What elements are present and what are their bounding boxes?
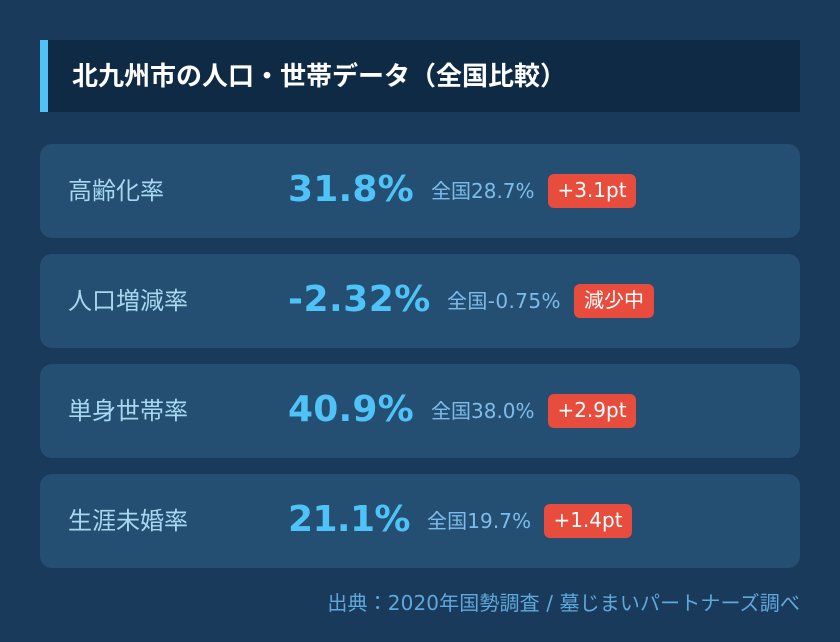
label: population change: 人口増減率 [68,287,188,315]
panel: aging rate [40,144,800,238]
label: aging rate: 高齢化率 [68,177,164,205]
value: lifetime unmarried rate: 21.1% [288,499,410,540]
badge: decreasing: 減少中 [584,288,644,312]
badge: lifetime unmarried difference [544,504,632,538]
panel: population change [40,254,800,348]
national comparison: lifetime unmarried rate: 全国19.7% [427,509,531,533]
badge: aging rate difference: +3.1pt [557,178,627,202]
title [40,40,800,112]
source note: 出典：2020年国勢調査 / 墓じまいパートナーズ調べ [327,591,800,615]
panel: lifetime unmarried rate [40,474,800,568]
badge: single household difference [548,394,636,428]
value: population change: -2.32% [288,279,431,320]
national comparison: aging rate: 全国28.7% [431,179,535,203]
national comparison: population change: 全国-0.75% [447,289,561,313]
badge: aging rate difference [548,174,636,208]
badge: lifetime unmarried difference: +1.4pt [553,508,623,532]
badge: decreasing [574,284,654,318]
value: single household rate: 40.9% [288,389,414,430]
badge: single household difference: +2.9pt [557,398,627,422]
label: single household rate: 単身世帯率 [68,397,188,425]
label: lifetime unmarried rate: 生涯未婚率 [68,507,188,535]
title: 北九州市の人口・世帯データ（全国比較） [72,62,566,92]
value: aging rate: 31.8% [288,169,414,210]
national comparison: single household rate: 全国38.0% [431,399,535,423]
panel: single household rate [40,364,800,458]
